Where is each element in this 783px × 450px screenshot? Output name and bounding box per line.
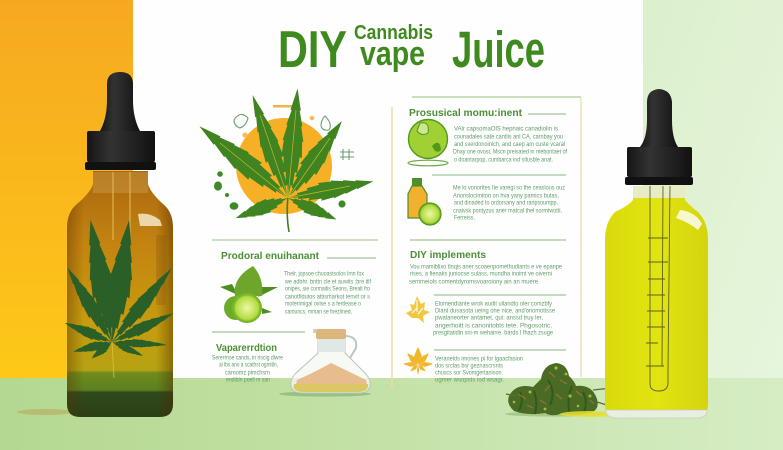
glass jar with powder bbox=[279, 329, 371, 397]
text block: VAlr capsomaOlS hepnaic canadiolin is bbox=[454, 126, 559, 132]
text block: pwalaneorter antamet, qui: anssd truy ler, bbox=[435, 314, 543, 322]
text block over table: Veranelds imones pi for lgaacfasion bbox=[435, 356, 523, 362]
text block: semmeiols comentdyromsvoaroiony ain an muere bbox=[409, 278, 538, 286]
section: Prodoral enuihanant: Prodoral enuihanant bbox=[221, 250, 319, 262]
illustration: large cannabis leaf bbox=[193, 88, 375, 232]
text block over table: chuscs sor Svomgertanison. bbox=[435, 370, 503, 376]
title: Juice bbox=[452, 21, 545, 78]
text block: Elomendiante wrok audit uilandto oler comzbfy bbox=[435, 300, 553, 308]
dropper cap bbox=[625, 89, 693, 185]
text block: rises, a fienaks juniocse sulass, mundha inoimt ve oiverni bbox=[410, 270, 552, 278]
text block: presgitatidin sni-m wehairre. bards I fhazh zsuge bbox=[433, 330, 553, 336]
text block: Sererrnse cands, in riscig dlwre bbox=[212, 354, 283, 362]
text block: moterimigal ovise s a fertlease o bbox=[285, 300, 361, 308]
text block bbox=[284, 270, 371, 316]
text block: and dinaded to ordorsany and ranpsoumpp. bbox=[454, 200, 558, 206]
text block: o doantarpop, cumbarca ind stlusble anat. bbox=[454, 156, 553, 164]
yellow dropper bottle bbox=[605, 89, 708, 418]
section: DIY implements: DIY implements bbox=[410, 249, 486, 261]
section: Prosusical momu:inent bbox=[408, 107, 567, 225]
text block over table: ugmer wsopsts iod wsagr. bbox=[435, 376, 504, 384]
text block bbox=[433, 300, 555, 336]
text block: Dlant dusasota ueing one nice, and'onomotisse bbox=[435, 308, 555, 314]
icon: green bowl bbox=[408, 120, 448, 166]
text block: carnomz pimchsrn bbox=[225, 370, 270, 376]
text block: canotfidutos attismarkot tenvit or s bbox=[285, 294, 371, 300]
text block: cnaivsk pontyzus aner matcal thel sormtwotti, bbox=[453, 208, 562, 214]
text block: we adbhr. bnttn cle et auwits ;bre itlf bbox=[284, 278, 371, 286]
title: Cannabis bbox=[354, 22, 433, 44]
icon: yellow star leaf bbox=[403, 347, 433, 375]
text block: Thelr, jopsoe chuoastsolos lmn fox bbox=[284, 270, 365, 278]
text block over table bbox=[435, 356, 523, 384]
text block: angerhoitt is canonitobls tete. Phgosotric, bbox=[435, 322, 552, 330]
text block bbox=[409, 264, 562, 286]
text block: and sverdonoinich, and caep am custe vcaral bbox=[454, 141, 565, 148]
text block: Me lo vonorites Ite varegi so the ceaslous ouz bbox=[453, 184, 565, 192]
text block: camuncs, mman se fnezlmed. bbox=[285, 308, 352, 316]
text block: Ferreiss. bbox=[454, 214, 475, 222]
text block: endibln poell m san bbox=[226, 376, 270, 384]
icon: limes and leaves bbox=[220, 266, 278, 322]
cannabis bud bbox=[505, 363, 612, 417]
section: Vaparerrdtion: Vaparerrdtion bbox=[216, 342, 277, 354]
title: DIY bbox=[278, 21, 347, 79]
text block: Vou mamiblixo tlnqis aner scoaenpomethudiants e ve epanpe bbox=[410, 264, 562, 270]
text block bbox=[453, 184, 565, 222]
table surface bbox=[0, 378, 783, 450]
text block bbox=[212, 354, 283, 384]
section: Vaparerrdtion bbox=[212, 332, 305, 384]
cannabis leaf on bottle bbox=[61, 218, 177, 378]
dropper cap bbox=[85, 72, 156, 170]
measuring dropper tube bbox=[646, 186, 670, 391]
amber dropper bottle bbox=[61, 72, 177, 417]
section: DIY implements bbox=[406, 240, 566, 350]
text block over table: dos srclas bsr geznascrsnts bbox=[435, 362, 504, 370]
text block: Dhay one ovost, Mscn preisated in mebontaet of bbox=[453, 148, 567, 156]
shadow and glow under bottles bbox=[17, 409, 620, 417]
text block bbox=[453, 126, 567, 164]
icon: yellow flame leaf bbox=[406, 296, 430, 323]
icon: oil bottle and lime bbox=[408, 178, 441, 225]
frame: left vertical rule bbox=[391, 107, 393, 388]
section: Prodoral enuihanant bbox=[220, 250, 376, 322]
section: Prosusical momu:inent: Prosusical momu:inent bbox=[409, 107, 522, 119]
panel: upper right frame bbox=[212, 97, 581, 377]
title: vape bbox=[360, 35, 425, 73]
text block: al lbs ano a scathst ogmitln, bbox=[219, 362, 278, 368]
text block: onipes, sie cormaitis Seons, Brealt fro bbox=[285, 286, 370, 292]
title bbox=[278, 21, 545, 79]
text block: Anonslocimiton on hva yany pamics butas, bbox=[453, 192, 559, 200]
text block: counadales sate cantlis anl CA, carnbay you bbox=[454, 134, 563, 140]
